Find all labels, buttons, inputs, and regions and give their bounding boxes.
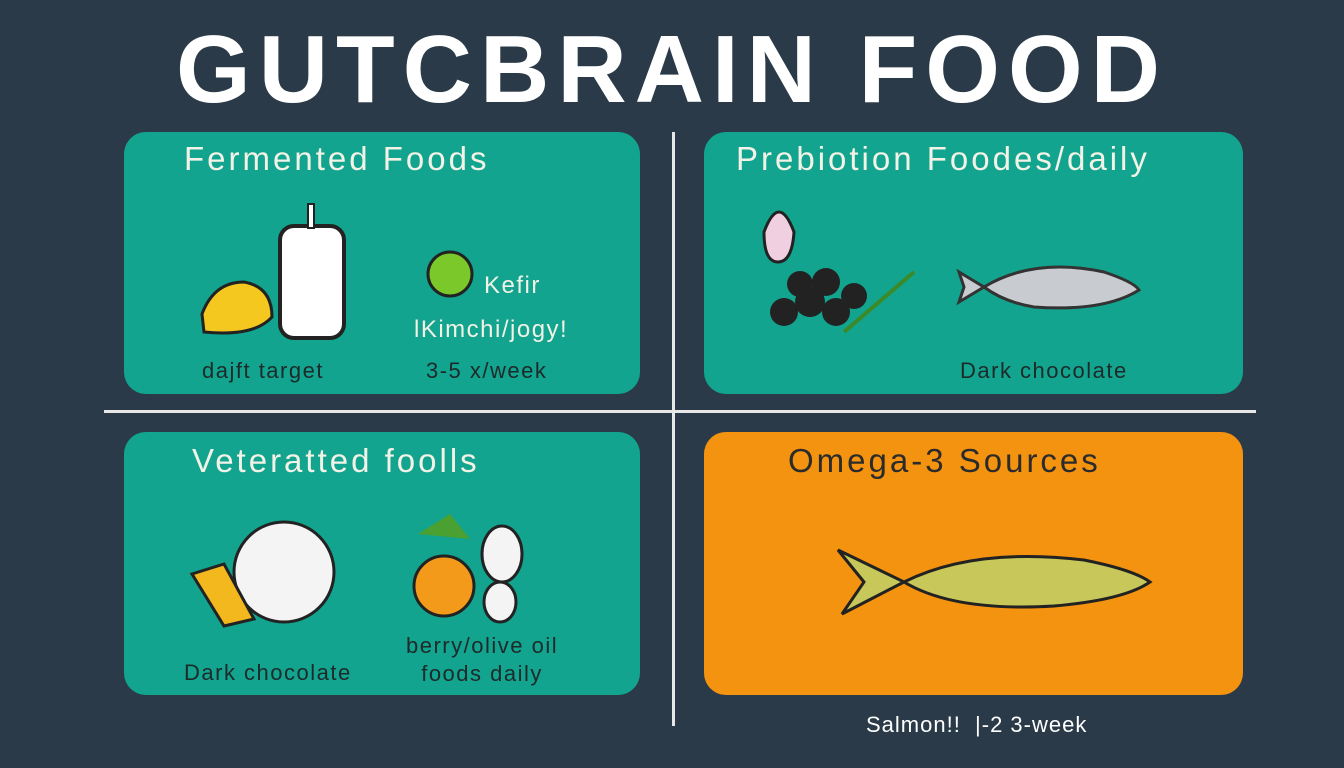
text: frequency: 3-5 x/week xyxy=(426,358,547,383)
panel: vegetated foods xyxy=(124,432,640,695)
text: kimchi: lKimchi/jogy! xyxy=(414,316,568,343)
icon: berries and garlic xyxy=(762,210,916,334)
text: salmon footnote: Salmon!! |-2 3-week xyxy=(866,712,1087,737)
heading: vegetated: Veteratted foolls xyxy=(192,442,480,479)
text: berry olive oil xyxy=(406,633,558,686)
title: GUTCBRAIN FOOD xyxy=(176,16,1168,123)
panel: prebiotic foods xyxy=(704,132,1243,394)
heading: prebiotic: Prebiotion Foodes/daily xyxy=(736,140,1150,177)
icon: pineapple and bottle xyxy=(412,514,524,624)
text: dark chocolate: Dark chocolate xyxy=(960,358,1128,383)
text: kefir: Kefir xyxy=(484,272,541,299)
text: berry olive oil: foods daily xyxy=(421,661,543,686)
panel: omega-3 sources xyxy=(704,432,1243,695)
icon: jar and shell xyxy=(200,203,346,340)
icon: fish xyxy=(956,266,1141,310)
icon: cabbage and squash xyxy=(190,520,336,628)
icon: fish xyxy=(836,548,1152,616)
heading: fermented: Fermented Foods xyxy=(184,140,489,177)
icon: green apple xyxy=(426,250,474,298)
heading: omega-3: Omega-3 Sources xyxy=(788,442,1101,479)
panel: fermented foods xyxy=(124,132,640,394)
text: daily target: dajft target xyxy=(202,358,324,383)
text: dark chocolate: Dark chocolate xyxy=(184,660,352,685)
text: berry olive oil: berry/olive oil xyxy=(406,633,558,658)
